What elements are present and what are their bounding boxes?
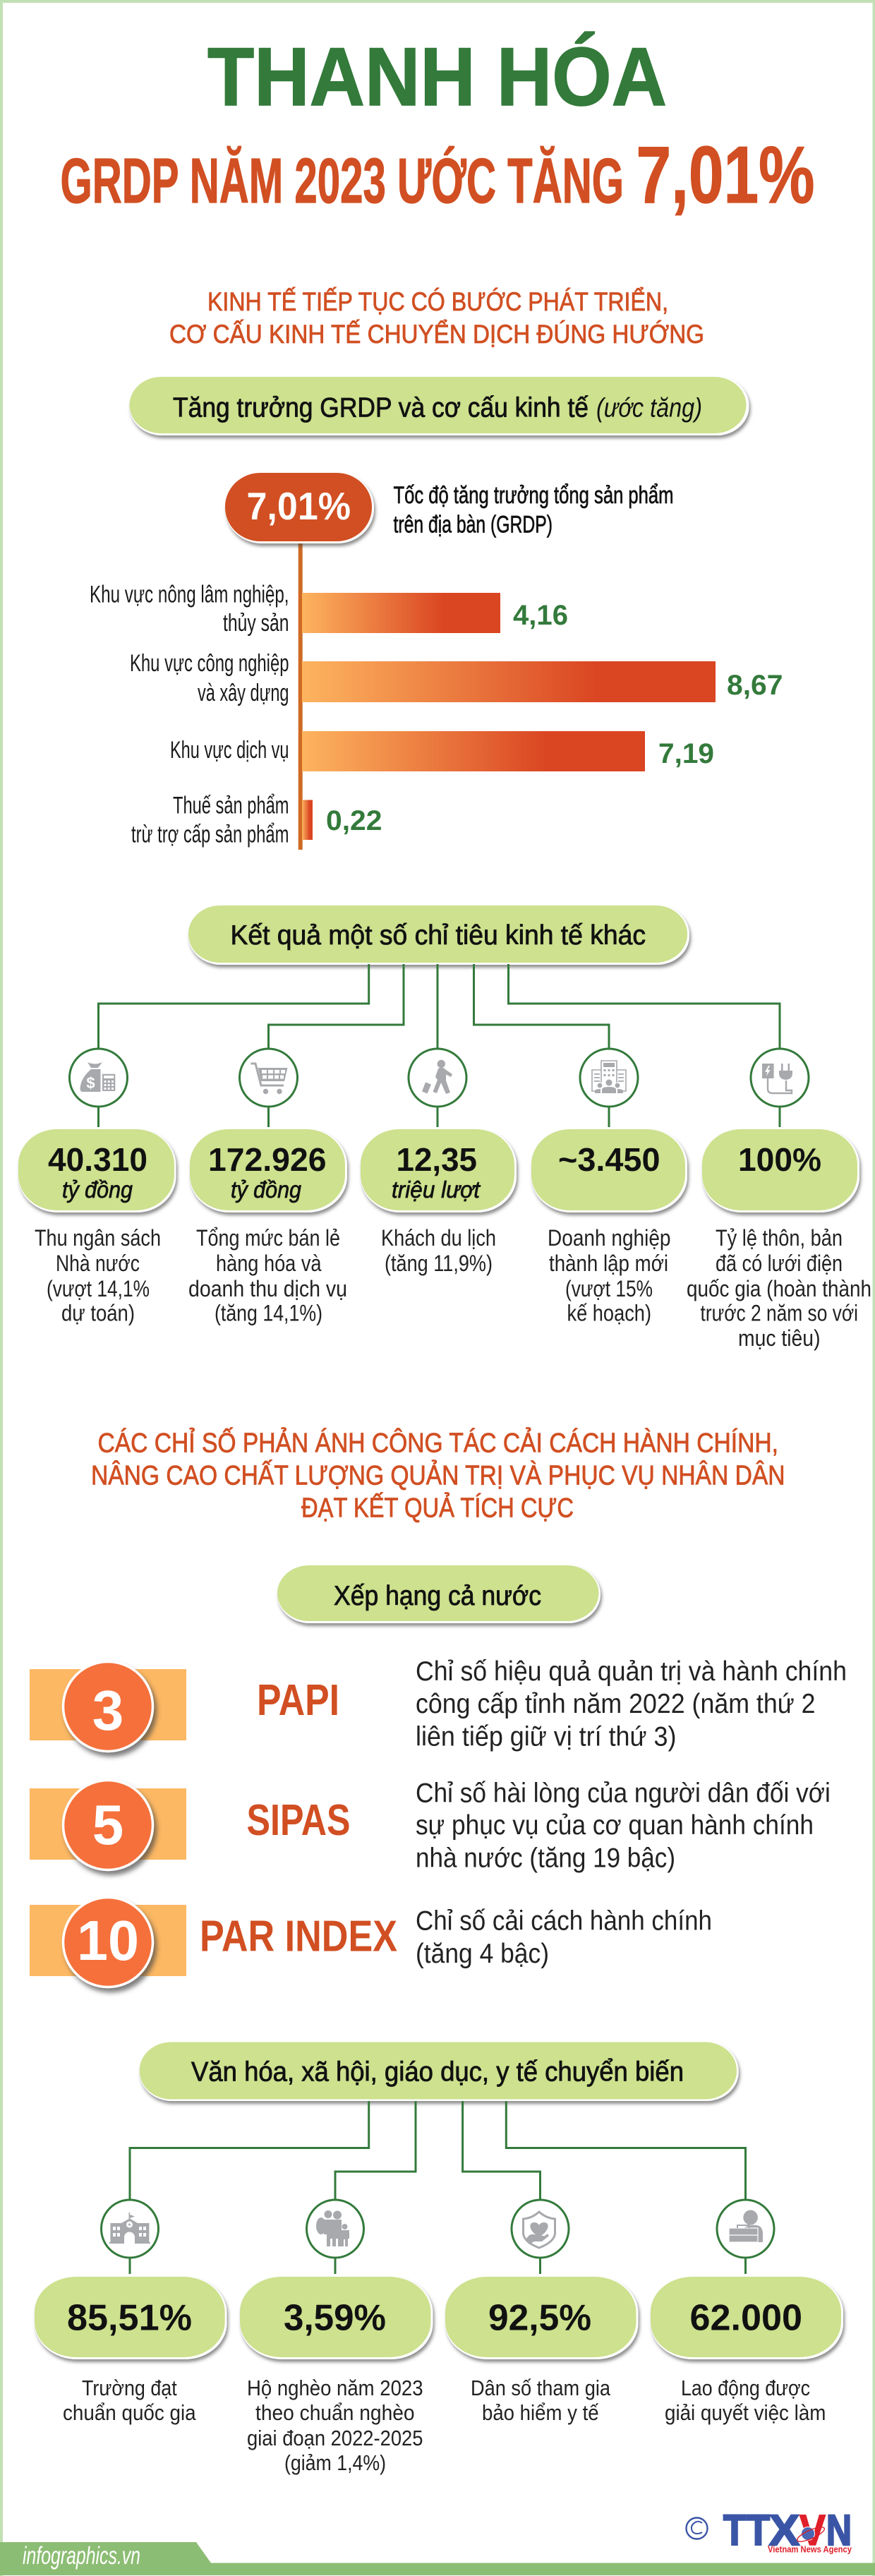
logo: TTXVN copyright: X (769, 2506, 799, 2554)
icon: electric plug (751, 1049, 809, 1107)
chart axis (298, 536, 303, 850)
indicator: state budget revenue: dự toán) (61, 1300, 135, 1325)
callout: 7,01% total: 7,01% (247, 484, 351, 528)
connector lines: economic indicators (99, 964, 780, 1127)
pill heading: other economic indicators (188, 905, 689, 965)
indicator: villages with national grid: mục tiêu) (738, 1325, 820, 1351)
bar row: agriculture 4,16: 4,16 (513, 600, 568, 631)
indicator: jobs created: giải quyết việc làm (665, 2400, 826, 2425)
heading: administrative reform section: CÁC CHỈ SỐ PHẢN ÁNH CÔNG TÁC CẢI CÁCH HÀNH CHÍNH, (97, 1427, 778, 1458)
footer band with source: infographics.vn (23, 2542, 140, 2570)
indicator: new enterprises (531, 1049, 687, 1325)
pill heading: culture, society, education, health (140, 2042, 739, 2101)
ranking: PAPI rank 3: công cấp tỉnh năm 2022 (năm thứ 2 (416, 1689, 816, 1719)
icon: money bag and calculator (69, 1049, 127, 1107)
indicator: retail sales: doanh thu dịch vụ (188, 1276, 347, 1301)
bar row: product taxes 0,22 (131, 792, 382, 848)
indicator: retail sales: hàng hóa và (216, 1251, 322, 1276)
pill heading: culture, society, education, health: Văn hóa, xã hội, giáo dục, y tế chuyển biến (191, 2057, 684, 2088)
indicator: schools meeting national standard: 85,51% (67, 2298, 192, 2339)
indicator: villages with national grid (687, 1049, 871, 1351)
ranking: PAPI rank 3: liên tiếp giữ vị trí thứ 3) (416, 1722, 676, 1752)
callout description: trên địa bàn (GRDP) (394, 511, 553, 538)
indicator: villages with national grid: đã có lưới điện (716, 1251, 843, 1276)
pill heading: national ranking (277, 1565, 601, 1623)
icon: shield with heart and hand (512, 2200, 569, 2258)
heading: administrative reform section: ĐẠT KẾT QUẢ TÍCH CỰC (301, 1492, 574, 1523)
bar chart: GRDP growth by sector (90, 473, 783, 850)
indicator: poor households (240, 2200, 433, 2475)
bar row: product taxes 0,22: trừ trợ cấp sản phẩm (131, 821, 289, 848)
indicator: state budget revenue: tỷ đồng (62, 1176, 133, 1203)
ranking: SIPAS rank 5: SIPAS (247, 1796, 350, 1845)
pill heading: other economic indicators: Kết quả một số chỉ tiêu kinh tế khác (230, 920, 646, 951)
indicator: state budget revenue: 40.310 (48, 1141, 147, 1178)
heading: economy section (169, 287, 704, 349)
logo: TTXVN copyright: Vietnam News Agency (768, 2545, 852, 2555)
bar row: services 7,19 (170, 731, 714, 771)
bar row: product taxes 0,22: Thuế sản phẩm (173, 792, 289, 819)
bar row: agriculture 4,16: Khu vực nông lâm nghiệp, (90, 582, 289, 608)
indicator: tourists (361, 1049, 517, 1276)
indicator: state budget revenue: (vượt 14,1% (47, 1276, 150, 1301)
pill heading: national ranking: Xếp hạng cả nước (334, 1581, 541, 1611)
bar row: agriculture 4,16 (90, 582, 568, 637)
ranking: SIPAS rank 5 (30, 1778, 831, 1873)
bar row: industry 8,67: và xây dựng (198, 680, 289, 706)
ranking: SIPAS rank 5: Chỉ số hài lòng của người dân đối với (416, 1778, 831, 1808)
indicator: health insurance: 92,5% (488, 2298, 591, 2339)
icon: money bag and calculator: $ (86, 1074, 95, 1092)
heading: administrative reform section: NÂNG CAO CHẤT LƯỢNG QUẢN TRỊ VÀ PHỤC VỤ NHÂN DÂN (91, 1459, 785, 1491)
bar row: agriculture 4,16: thủy sản (223, 610, 289, 637)
subtitle: GRDP 2023 growth: 7,01% (636, 131, 814, 220)
ranking: PAPI rank 3: 3 (92, 1679, 123, 1742)
bar row: services 7,19: 7,19 (658, 738, 714, 769)
footer band with source (0, 2542, 875, 2575)
indicator: villages with national grid: Tỷ lệ thôn, bản (716, 1225, 843, 1251)
icon: traveller with suitcase (409, 1049, 466, 1107)
ranking: PAR INDEX rank 10 (30, 1897, 712, 1987)
ranking: PAR INDEX rank 10: Chỉ số cải cách hành chính (416, 1906, 712, 1937)
icon: family (306, 2200, 364, 2258)
indicator: retail sales: Tổng mức bán lẻ (196, 1225, 340, 1251)
indicator: state budget revenue (18, 1049, 176, 1325)
indicator: retail sales (188, 1049, 347, 1325)
indicator: new enterprises: ~3.450 (558, 1141, 660, 1178)
icon: shopping cart (240, 1049, 298, 1107)
indicator: tourists: Khách du lịch (381, 1225, 496, 1251)
indicator: health insurance: bảo hiểm y tế (482, 2400, 599, 2425)
indicator: poor households: theo chuẩn nghèo (255, 2400, 415, 2425)
heading: economy section: CƠ CẤU KINH TẾ CHUYỂN DỊCH ĐÚNG HƯỚNG (169, 319, 704, 349)
indicator: tourists: 12,35 (397, 1141, 477, 1178)
logo: TTXVN copyright: V (799, 2506, 826, 2554)
indicator: schools meeting national standard: chuẩn quốc gia (63, 2400, 196, 2425)
pill heading: GRDP growth and structure: Tăng trưởng GRDP và cơ cấu kinh tế (173, 392, 589, 423)
indicator: health insurance (445, 2200, 638, 2425)
indicator: retail sales: (tăng 14,1%) (215, 1300, 322, 1325)
logo: TTXVN copyright: T (723, 2506, 746, 2554)
indicator: schools meeting national standard: Trường đạt (82, 2376, 177, 2400)
bar row: services 7,19: Khu vực dịch vụ (170, 737, 289, 764)
ranking: PAPI rank 3: Chỉ số hiệu quả quản trị và hành chính (416, 1656, 847, 1687)
indicator: poor households: 3,59% (284, 2298, 386, 2339)
ranking: PAPI rank 3 (30, 1656, 847, 1752)
indicator: schools meeting national standard (35, 2200, 227, 2425)
indicator: retail sales: 172.926 (208, 1141, 326, 1178)
icon: worker with briefcase (717, 2200, 774, 2258)
ranking: PAR INDEX rank 10: (tăng 4 bậc) (416, 1939, 549, 1969)
pill heading: GRDP growth and structure (130, 377, 749, 435)
callout description: Tốc độ tăng trưởng tổng sản phẩm (394, 482, 673, 509)
ranking: PAR INDEX rank 10: PAR INDEX (200, 1913, 397, 1961)
logo: TTXVN copyright: T (747, 2506, 770, 2554)
indicator: jobs created: Lao động được (681, 2376, 810, 2400)
indicator: state budget revenue: Nhà nước (56, 1251, 140, 1276)
indicator: health insurance: Dân số tham gia (471, 2376, 611, 2400)
ranking: PAR INDEX rank 10: 10 (77, 1909, 139, 1972)
icon: buildings and people (580, 1049, 638, 1107)
callout: 7,01% total (225, 473, 374, 543)
indicator: poor households: (giảm 1,4%) (284, 2450, 386, 2475)
connector lines: social indicators (130, 2101, 745, 2274)
ranking: SIPAS rank 5: nhà nước (tăng 19 bậc) (416, 1843, 675, 1873)
logo: TTXVN copyright (686, 2506, 852, 2555)
ranking: PAPI rank 3: PAPI (257, 1676, 339, 1725)
bar row: industry 8,67: 8,67 (727, 670, 783, 701)
indicator: new enterprises: kế hoạch) (567, 1300, 651, 1325)
indicator: villages with national grid: 100% (738, 1141, 821, 1178)
logo: TTXVN copyright: N (826, 2506, 852, 2554)
indicator: state budget revenue: Thu ngân sách (35, 1225, 161, 1251)
indicator: jobs created: 62.000 (690, 2298, 802, 2339)
indicator: new enterprises: (vượt 15% (565, 1276, 653, 1301)
pill heading: GRDP growth and structure: (ước tăng) (596, 394, 702, 423)
indicator: poor households: giai đoạn 2022-2025 (247, 2426, 423, 2450)
indicator: poor households: Hộ nghèo năm 2023 (247, 2376, 423, 2400)
bar row: industry 8,67: Khu vực công nghiệp (130, 650, 289, 677)
indicator: new enterprises: Doanh nghiệp (548, 1225, 670, 1251)
ranking: SIPAS rank 5: sự phục vụ của cơ quan hành chính (416, 1810, 814, 1841)
callout description (394, 482, 673, 538)
heading: administrative reform section (91, 1427, 785, 1523)
heading: economy section: KINH TẾ TIẾP TỤC CÓ BƯỚC PHÁT TRIỂN, (207, 287, 668, 316)
bar row: product taxes 0,22: 0,22 (326, 805, 382, 836)
indicator: tourists: triệu lượt (392, 1176, 481, 1203)
ranking: SIPAS rank 5: 5 (92, 1793, 123, 1856)
bar row: industry 8,67 (130, 650, 783, 706)
indicator: new enterprises: thành lập mới (549, 1251, 668, 1276)
indicator: jobs created (651, 2200, 843, 2425)
icon: school building (102, 2200, 158, 2258)
indicator: tourists: (tăng 11,9%) (385, 1251, 493, 1276)
title: Thanh Hóa: THANH HÓA (207, 30, 667, 123)
indicator: retail sales: tỷ đồng (231, 1176, 302, 1203)
